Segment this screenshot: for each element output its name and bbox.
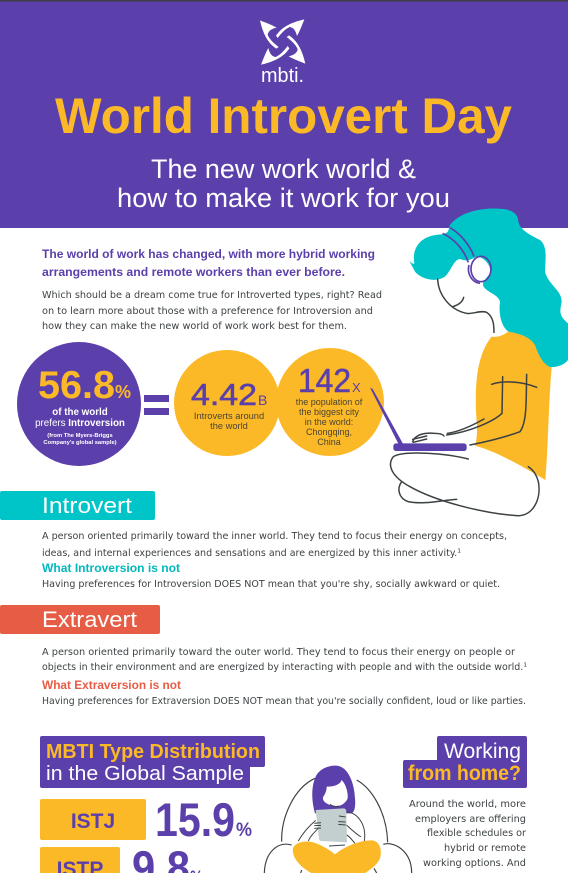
stat: 142x: the biggest city [299, 407, 360, 417]
text: working from home: employers are offering [415, 814, 526, 825]
heading: MBTI type distribution: in the Global Sample [46, 763, 244, 785]
face [323, 780, 348, 806]
heading: working from home: Working [444, 740, 521, 763]
definition text: A person oriented primarily toward the inner world. They tend to focus their energy on concepts, [42, 531, 507, 542]
intro text: on to learn more about those with a preference for Introversion and [42, 306, 373, 317]
text: working from home: working options. And [423, 858, 526, 869]
logo: mbti: mbti. [261, 65, 304, 87]
what extraversion is not: What Extraversion is not [42, 680, 181, 692]
row: ISTJ 15.9 percent [40, 793, 252, 846]
tablet [316, 808, 347, 842]
stat: 56.8 percent: % [115, 382, 131, 402]
illustration: woman in chair with tablet [264, 766, 412, 873]
logo: mbti [260, 19, 305, 87]
face and body lines [391, 279, 539, 516]
stat: 4.42B: the world [210, 421, 248, 431]
row: ISTJ 15.9 percent: ISTJ [71, 810, 115, 833]
stat: 56.8 percent: (from The Myers-Briggs [47, 433, 113, 439]
stat: 4.42B: B [258, 392, 267, 408]
hair [312, 766, 355, 813]
subtitle [117, 154, 450, 213]
title: World Introvert Day [55, 88, 512, 144]
heading: MBTI type distribution: MBTI Type Distribution [46, 741, 260, 763]
stat: 56.8 percent: prefers Introversion [35, 418, 125, 429]
fingers [314, 816, 346, 828]
hair [409, 208, 568, 367]
arms [298, 804, 365, 846]
what introversion is not: Having preferences for Introversion DOES NOT mean that you're shy, socially awkward or quiet. [42, 579, 500, 590]
stat: 142x: X [352, 380, 361, 395]
equals sign [144, 395, 169, 415]
stat: 142x: Chongqing, [306, 427, 352, 437]
illustration: woman with headphones and laptop [370, 208, 568, 516]
subtitle: how to make it work for you [117, 183, 450, 213]
definition text [42, 647, 527, 673]
headphones [443, 228, 491, 283]
definition text: ideas, and internal experiences and sensations and are energized by this inner activity.¹ [42, 548, 461, 559]
panel: purple header [0, 0, 568, 228]
heading: introvert [0, 491, 155, 520]
row: ISTP 9.8 percent [40, 841, 203, 873]
heading: working from home: from home? [408, 762, 521, 785]
heading: introvert: Introvert [42, 493, 132, 518]
row: ISTJ 15.9 percent: % [236, 820, 252, 841]
what introversion is not: What Introversion is not [42, 563, 180, 575]
definition text [42, 531, 507, 559]
definition text: objects in their environment and are energized by interacting with people and with the outside world.¹ [42, 662, 527, 673]
shirt [475, 332, 552, 480]
stat: 56.8 percent: Company's global sample) [43, 440, 117, 446]
definition text: A person oriented primarily toward the outer world. They tend to focus their energy on people or [42, 647, 516, 658]
panel: introvert [0, 491, 507, 590]
heading: MBTI type distribution [40, 736, 265, 788]
what extraversion is not: Having preferences for Extraversion DOES NOT mean that you're socially confident, loud or like parties. [42, 696, 526, 707]
text: working from home: flexible schedules or [427, 828, 527, 839]
stat: 4.42B: 4.42 [191, 377, 257, 412]
intro text: Which should be a dream come true for Introverted types, right? Read [42, 290, 382, 301]
what introversion is not [42, 563, 500, 590]
stat: 142x: in the world: [305, 417, 353, 427]
intro text [42, 249, 382, 332]
stat: 56.8 percent: of the world [52, 407, 108, 418]
intro text: arrangements and remote workers than ever before. [42, 267, 345, 279]
laptop [370, 388, 467, 451]
text: working from home: hybrid or remote [444, 843, 526, 854]
stat: 142x: China [317, 437, 341, 447]
panel: extravert [0, 605, 527, 707]
stat: 142x: the population of [296, 397, 363, 407]
intro text: how they can make the new world of work work best for them. [42, 321, 347, 332]
intro text: The world of work has changed, with more hybrid working [42, 249, 375, 261]
chair outline [264, 778, 412, 873]
text: working from home [409, 799, 527, 869]
stat: 142x: 142 [298, 362, 351, 399]
stat: 4.42B: Introverts around [194, 411, 264, 421]
stat: 4.42B [174, 350, 280, 456]
heading: extravert [0, 605, 160, 634]
stat: 56.8 percent [17, 342, 141, 466]
stat: 56.8 percent: 56.8 [38, 364, 115, 407]
what extraversion is not [42, 680, 526, 707]
heading: extravert: Extravert [42, 607, 137, 632]
row: ISTJ 15.9 percent: 15.9 [155, 793, 235, 846]
subtitle: The new work world & [151, 154, 416, 184]
text: working from home: Around the world, more [409, 799, 526, 810]
stat: 142x [276, 348, 384, 456]
heading: working from home [403, 736, 527, 788]
lap [293, 840, 381, 873]
